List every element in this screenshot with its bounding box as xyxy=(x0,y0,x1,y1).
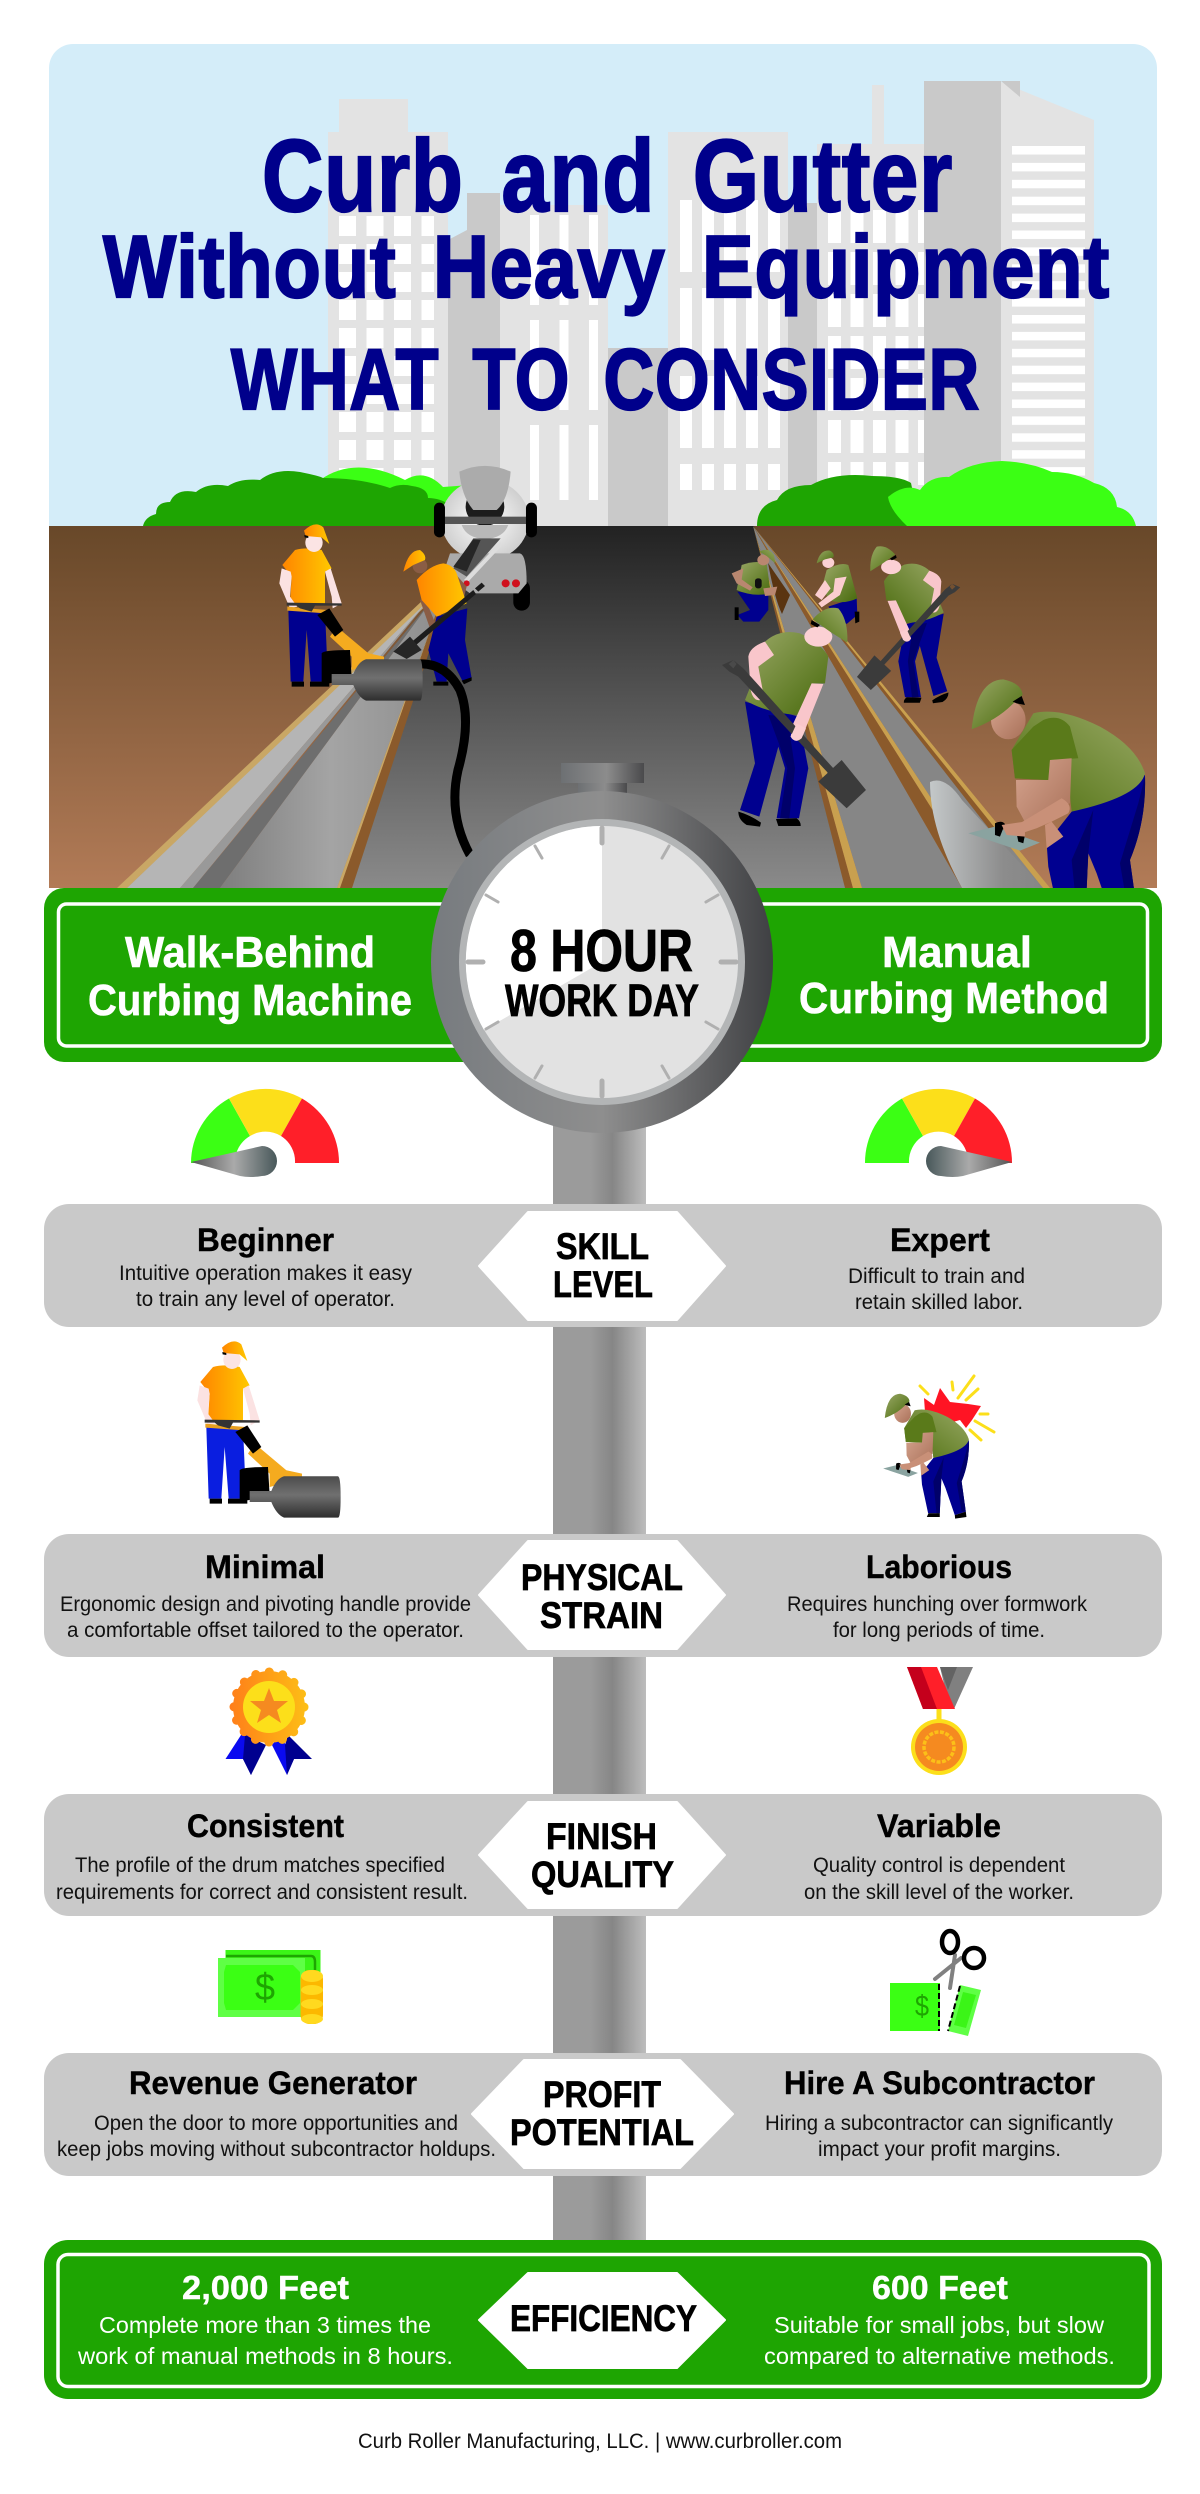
text: minimal xyxy=(60,1549,471,1642)
bushes right xyxy=(757,461,1136,526)
label: profit potential xyxy=(472,2060,733,2168)
heading: walk-behind curbing machine xyxy=(88,928,412,1025)
text: revenue generator: Open the door to more opportunities and xyxy=(94,2111,458,2135)
walk-behind curbing machine and operator xyxy=(279,524,423,701)
label: efficiency xyxy=(479,2273,725,2368)
concrete mixer truck xyxy=(434,466,537,611)
heading: manual curbing method: Manual xyxy=(882,928,1032,977)
stopwatch xyxy=(431,763,773,1133)
coin stack xyxy=(300,1970,323,2024)
stopwatch label: WORK DAY xyxy=(505,975,699,1026)
text: expert: retain skilled labor. xyxy=(855,1290,1023,1314)
stopwatch label: 8 HOUR xyxy=(510,918,693,984)
text: expert: Expert xyxy=(890,1222,990,1258)
text: variable: Quality control is dependent xyxy=(813,1853,1065,1877)
stopwatch label xyxy=(505,918,699,1026)
text: revenue generator: keep jobs moving without subcontractor holdups. xyxy=(57,2137,496,2161)
icon: skill gauge high xyxy=(865,1089,1012,1177)
panel: method headers xyxy=(44,888,1162,1062)
icon: operator with walk-behind machine xyxy=(197,1341,341,1518)
hose xyxy=(418,664,470,855)
text: consistent xyxy=(56,1808,468,1904)
right formwork and curb xyxy=(753,526,1050,888)
text: hire a subcontractor: Hiring a subcontractor can significantly xyxy=(765,2111,1113,2135)
label: physical strain xyxy=(479,1541,725,1649)
tick marks xyxy=(468,828,736,1096)
bushes left xyxy=(143,468,470,526)
text: expert xyxy=(848,1222,1025,1314)
text: consistent: Consistent xyxy=(187,1808,344,1844)
text: minimal: a comfortable offset tailored to the operator. xyxy=(67,1618,464,1642)
text: laborious: Requires hunching over formwork xyxy=(787,1592,1087,1616)
sky xyxy=(49,44,1157,526)
manual worker with trowel xyxy=(968,679,1146,888)
panel: skill level xyxy=(44,1204,1162,1327)
city skyline xyxy=(328,81,1094,526)
text: 2,000 feet: Complete more than 3 times the xyxy=(99,2312,431,2338)
text: 2,000 feet: 2,000 Feet xyxy=(182,2269,349,2306)
text: hire a subcontractor: Hire A Subcontractor xyxy=(784,2065,1095,2101)
text: expert: Difficult to train and xyxy=(848,1264,1025,1288)
text: 600 feet: compared to alternative methods. xyxy=(764,2343,1115,2369)
text: laborious xyxy=(787,1549,1087,1642)
icon: medal xyxy=(907,1667,973,1775)
icon: cash and coins xyxy=(218,1950,323,2024)
icon: skill gauge low xyxy=(191,1089,339,1177)
scissors xyxy=(935,1931,984,1988)
text: consistent: requirements for correct and consistent result. xyxy=(56,1880,468,1904)
support pole xyxy=(553,1125,646,2245)
text: revenue generator xyxy=(57,2065,496,2161)
icon: scissors cutting cash: $ xyxy=(915,1990,929,2023)
icon: scissors cutting cash xyxy=(890,1931,984,2036)
label: finish quality: QUALITY xyxy=(531,1854,674,1895)
title: Curb and Gutter xyxy=(262,119,953,233)
left curb and gutter xyxy=(117,600,446,888)
label: finish quality: FINISH xyxy=(546,1816,657,1857)
label: efficiency: EFFICIENCY xyxy=(510,2298,697,2339)
label: physical strain: STRAIN xyxy=(540,1595,663,1636)
manual worker with shovel, foreground xyxy=(722,608,866,827)
text: 600 feet xyxy=(764,2269,1115,2369)
panel: finish quality xyxy=(44,1794,1162,1916)
footer: Curb Roller Manufacturing, LLC. | www.curbroller.com xyxy=(358,2430,842,2453)
text: 2,000 feet: work of manual methods in 8 hours. xyxy=(77,2343,453,2369)
green header bar xyxy=(44,888,1162,1062)
worker with shovel, orange shirt xyxy=(393,550,485,686)
heading: walk-behind curbing machine: Curbing Machine xyxy=(88,976,412,1025)
text: variable: on the skill level of the worker. xyxy=(804,1880,1074,1904)
kneeling worker near xyxy=(732,550,777,622)
icon: cash and coins: $ xyxy=(255,1967,275,2009)
label: skill level: LEVEL xyxy=(553,1264,653,1305)
pain rays xyxy=(920,1376,994,1440)
manual worker with shovel, mid distance xyxy=(857,546,960,703)
kneeling worker far xyxy=(815,551,859,624)
text: beginner: Intuitive operation makes it easy xyxy=(119,1261,412,1285)
icon: worker with back pain xyxy=(883,1376,994,1519)
label: physical strain: PHYSICAL xyxy=(521,1557,683,1598)
text: minimal: Minimal xyxy=(205,1549,325,1585)
elapsed sector xyxy=(466,826,602,1030)
text: minimal: Ergonomic design and pivoting handle provide xyxy=(60,1592,471,1616)
heading: manual curbing method: Curbing Method xyxy=(799,974,1109,1023)
pain burst xyxy=(924,1388,981,1428)
panel: profit potential xyxy=(44,2053,1162,2176)
ground xyxy=(49,526,1157,888)
text: variable: Variable xyxy=(877,1808,1001,1844)
title xyxy=(103,119,1110,428)
text: beginner: to train any level of operator. xyxy=(136,1287,395,1311)
label: finish quality xyxy=(479,1802,725,1908)
heading: manual curbing method xyxy=(799,928,1109,1023)
heading: walk-behind curbing machine: Walk-Behind xyxy=(125,928,375,977)
panel: physical strain xyxy=(44,1534,1162,1657)
text: 2,000 feet xyxy=(77,2269,453,2369)
text: laborious: for long periods of time. xyxy=(833,1618,1045,1642)
text: variable xyxy=(804,1808,1074,1904)
text: 600 feet: 600 Feet xyxy=(872,2269,1008,2306)
stopwatch crown xyxy=(561,763,644,794)
text: laborious: Laborious xyxy=(866,1549,1012,1585)
text: 600 feet: Suitable for small jobs, but slow xyxy=(774,2312,1104,2338)
text: hire a subcontractor xyxy=(765,2065,1113,2161)
panel: hero scene xyxy=(49,44,1157,937)
text: beginner xyxy=(119,1222,412,1311)
header inner border xyxy=(58,904,1148,1046)
label: profit potential: PROFIT xyxy=(543,2074,661,2115)
icon: award rosette xyxy=(226,1671,312,1775)
text: revenue generator: Revenue Generator xyxy=(129,2065,417,2101)
label: skill level xyxy=(479,1212,725,1320)
text: hire a subcontractor: impact your profit margins. xyxy=(818,2137,1061,2161)
label: profit potential: POTENTIAL xyxy=(510,2112,694,2153)
text: beginner: Beginner xyxy=(197,1222,334,1258)
panel: efficiency xyxy=(44,2240,1162,2399)
asphalt road xyxy=(352,526,852,888)
text: consistent: The profile of the drum matches specified xyxy=(75,1853,445,1877)
label: skill level: SKILL xyxy=(556,1226,649,1267)
title: WHAT TO CONSIDER xyxy=(231,332,980,428)
